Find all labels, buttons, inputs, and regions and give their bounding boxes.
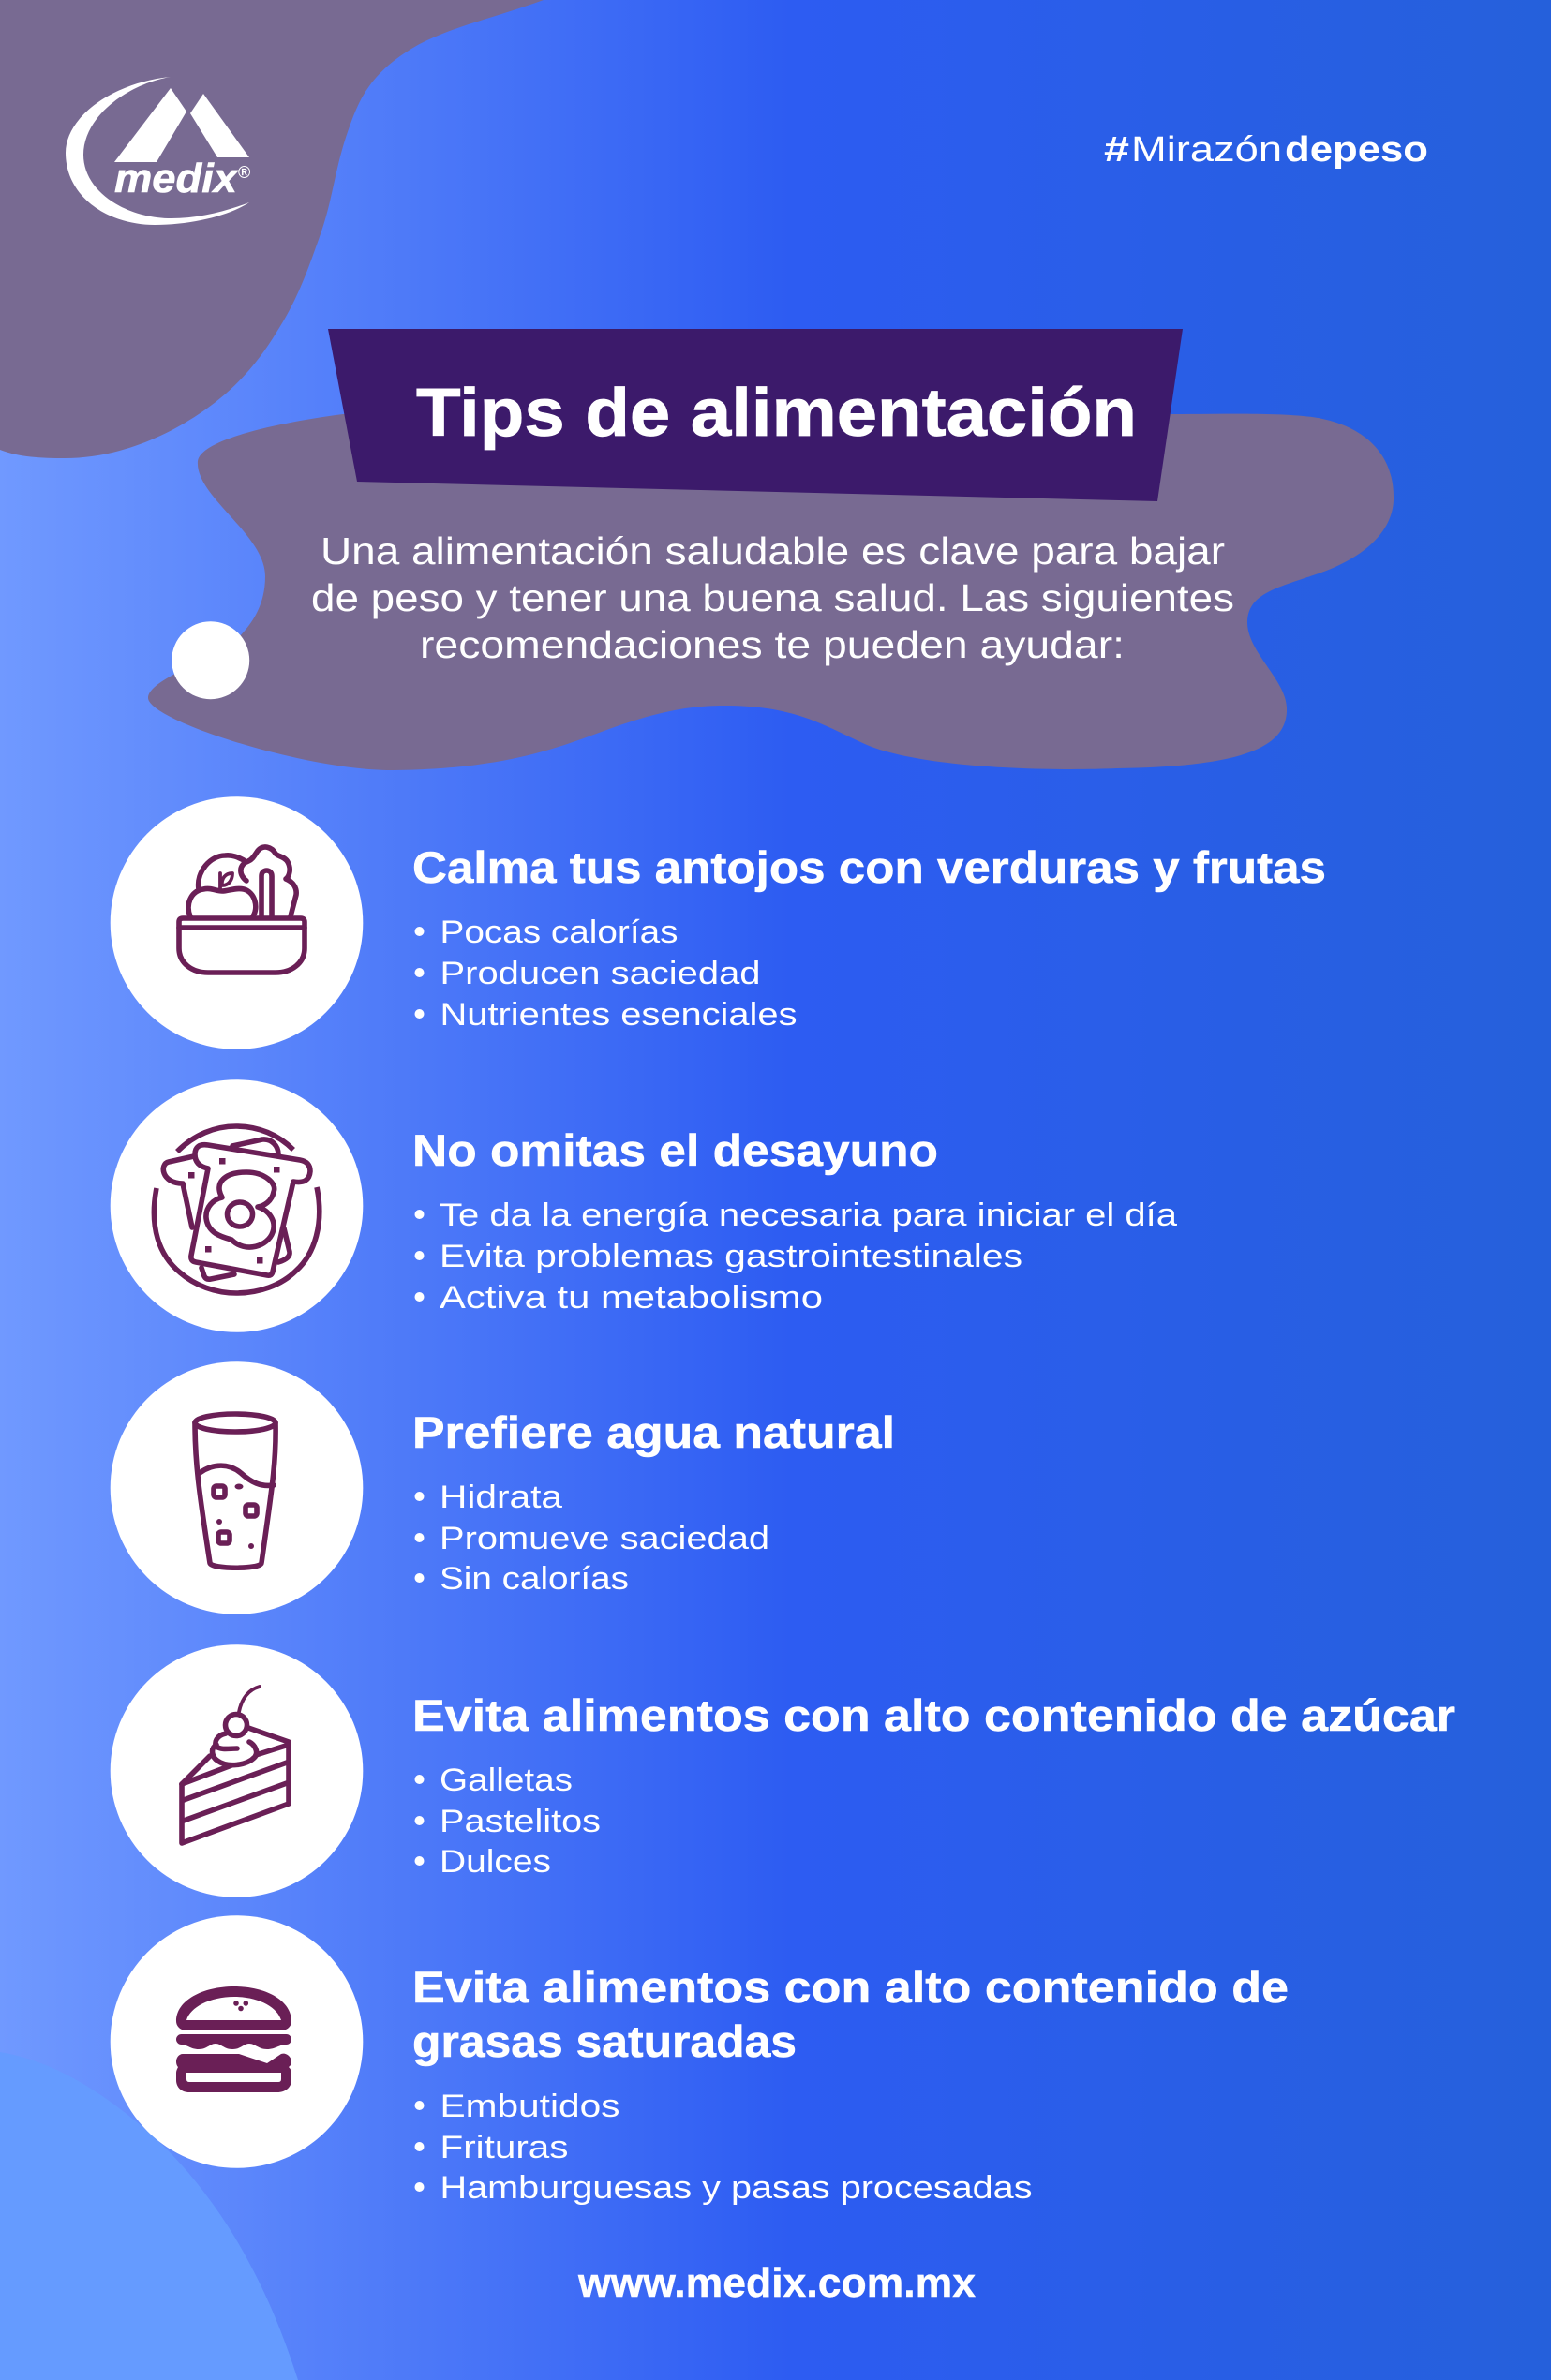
- tip 5 list: Frituras: [440, 2130, 568, 2165]
- icon circle 2: [111, 1079, 363, 1332]
- tip 3 heading: Prefiere agua natural: [412, 1407, 895, 1457]
- icon: glass of water: [195, 1414, 276, 1568]
- tip 4 list: [414, 1763, 601, 1880]
- tip 2 list: Te da la energía necesaria para iniciar el día: [440, 1197, 1177, 1233]
- logo crescent: [66, 77, 249, 225]
- tip 2 list: Evita problemas gastrointestinales: [440, 1239, 1022, 1274]
- tip 1 list: Producen saciedad: [440, 956, 761, 991]
- icon circle 4: [111, 1644, 363, 1897]
- icon circle 5: [111, 1915, 363, 2168]
- tip 4 list: Dulces: [440, 1844, 551, 1880]
- tip 1 heading: Calma tus antojos con verduras y frutas: [412, 842, 1326, 892]
- title banner: [328, 329, 1183, 501]
- intro blob: [148, 414, 1394, 770]
- tip 5 list: Hamburguesas y pasas procesadas: [440, 2170, 1033, 2206]
- tip 5 heading: [412, 1962, 1289, 2066]
- intro paragraph: de peso y tener una buena salud. Las siguientes: [311, 576, 1234, 619]
- tip 4 list: Pastelitos: [440, 1804, 601, 1839]
- tip 2 heading: No omitas el desayuno: [412, 1125, 938, 1175]
- title: Tips de alimentación: [416, 376, 1137, 451]
- tip 3: [111, 1361, 895, 1614]
- tip 2: [111, 1079, 1177, 1332]
- logo wordmark: medix: [114, 156, 239, 201]
- intro paragraph: Una alimentación saludable es clave para bajar: [321, 529, 1225, 573]
- tip 4: [111, 1644, 1455, 1897]
- white dot: [172, 621, 249, 699]
- footer url: www.medix.com.mx: [577, 2260, 977, 2306]
- tip 5 list: [414, 2089, 1033, 2206]
- tip 1 list: Pocas calorías: [440, 915, 679, 950]
- tip 5 heading: Evita alimentos con alto contenido de: [412, 1962, 1289, 2012]
- top-left blob: [0, 0, 544, 458]
- icon: salad bowl: [179, 847, 305, 973]
- intro paragraph: [311, 529, 1234, 666]
- tip 2 list: Activa tu metabolismo: [440, 1280, 823, 1316]
- intro paragraph: recomendaciones te pueden ayudar:: [420, 623, 1125, 666]
- icon: bubbles: [216, 1484, 254, 1549]
- tip 2 list: [414, 1197, 1177, 1316]
- tip 5: [111, 1915, 1289, 2206]
- icon: hamburger: [176, 1986, 291, 2092]
- tip 4 heading: Evita alimentos con alto contenido de azúcar: [412, 1690, 1455, 1740]
- tip 1 list: Nutrientes esenciales: [440, 997, 797, 1033]
- tip 1 list: [414, 915, 797, 1033]
- hashtag: Mirazón: [1131, 130, 1282, 170]
- tip 3 list: Promueve saciedad: [440, 1521, 769, 1556]
- icon: toast with egg on a plate: [154, 1126, 320, 1293]
- tip 3 list: Sin calorías: [440, 1561, 629, 1597]
- hashtag: #: [1104, 130, 1129, 170]
- bottom-left blob: [0, 2052, 298, 2380]
- icon: toast crumbs: [188, 1158, 279, 1263]
- icon: cake slice: [182, 1687, 289, 1843]
- tip 3 list: Hidrata: [440, 1480, 562, 1515]
- tip 5 list: Embutidos: [440, 2089, 620, 2124]
- hashtag: depeso: [1285, 130, 1428, 170]
- icon circle 1: [111, 796, 363, 1049]
- logo right peak: [190, 94, 249, 157]
- logo registered mark: ®: [238, 163, 250, 182]
- tip 1: [111, 796, 1326, 1049]
- icon circle 3: [111, 1361, 363, 1614]
- hashtag: [1104, 130, 1428, 170]
- medix logo: [66, 77, 250, 225]
- logo left peak: [114, 88, 186, 162]
- banner shape: [328, 329, 1183, 501]
- tip 3 list: [414, 1480, 769, 1597]
- tip 4 list: Galletas: [440, 1763, 573, 1798]
- tip 5 heading: grasas saturadas: [412, 2016, 797, 2066]
